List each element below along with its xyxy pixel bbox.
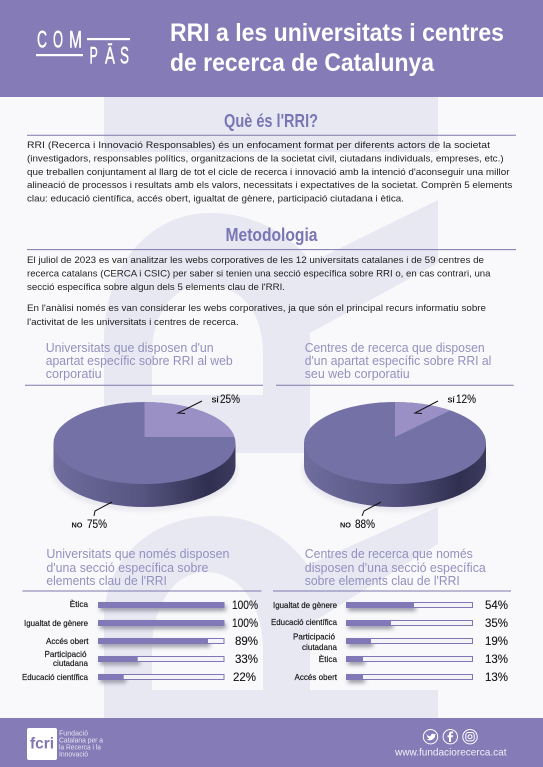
chart title [46,546,229,588]
bar: Accés obert: Accés obert [294,673,338,682]
bar: Accés obert [46,636,258,648]
heading: Metodologia [226,225,318,245]
intro text: RRI (Recerca i Innovació Responsables) és un enfocament format per diferents actors de la societat [27,140,490,151]
logo: Compàs: O [53,27,63,54]
panel: universities pie [25,340,263,531]
bar: Accés obert [294,672,508,684]
methodology text: El juliol de 2023 es van analitzar les webs corporatives de les 12 universitats catalanes i de 59 centres de [27,255,484,266]
label: NO 75%: NO [72,520,83,530]
label: SÍ 12%: SÍ [448,396,456,404]
chart title: corporatiu [46,366,102,381]
title: RRI a les universitats i centres [170,19,504,47]
intro text [27,140,513,205]
logo: Compàs [36,27,130,70]
bar: Accés obert: Accés obert [46,637,89,646]
bar: Accés obert: 89% [235,636,258,648]
logo: Compàs: M [69,27,82,53]
title: de recerca de Catalunya [170,49,435,77]
foundation name: la Recerca i la [59,744,101,752]
bar: Educació científica: 22% [233,672,256,684]
header band [0,0,543,97]
chart title [305,546,487,588]
bar: Igualtat de gènere [273,600,508,612]
label: SÍ 25% [178,394,240,414]
chart title: d'un apartat específic sobre RRI al [305,353,492,368]
background watermark [104,97,438,718]
icon: twitter [423,730,438,744]
bar: Educació científica [22,672,256,684]
bar chart [271,600,508,684]
bar: Educació científica: Educació científica [22,673,88,682]
label: NO 75% [72,502,112,531]
chart title: Universitats que disposen d'un [46,340,214,355]
bar: Participació ciutadana: 33% [235,654,258,666]
bar: Participació ciutadana: 19% [485,636,508,648]
icon: instagram [463,730,477,744]
bar: Igualtat de gènere [24,618,258,630]
chart title: Centres de recerca que només [305,546,473,561]
section: Què és l'RRI [27,111,516,205]
bar: Participació ciutadana: ciutadana [53,659,88,668]
bar: Ètica: 13% [485,654,508,666]
logo: Compàs: C [37,27,47,53]
methodology text [27,255,491,328]
chart title [46,340,233,381]
bar: Participació ciutadana: Participació [293,632,335,642]
logo: fcri [27,728,57,760]
label: SÍ 25%: 25% [220,394,240,406]
logo: Compàs: P [90,43,98,70]
pie chart [302,402,488,511]
bar: Accés obert: 13% [485,672,508,684]
icon: facebook [443,730,457,744]
label: NO 88%: 88% [355,519,375,531]
bar: Educació científica: 35% [485,618,508,630]
panel: universities key elements bars [22,546,262,684]
chart title: Universitats que només disposen [46,546,229,561]
bar: Igualtat de gènere: 100% [232,618,258,630]
chart title: d'una secció específica sobre [46,560,208,575]
bar: Igualtat de gènere: Igualtat de gènere [24,619,88,628]
heading: Què és l'RRI? [224,111,318,131]
panel: research centres pie [276,340,514,531]
foundation name: Innovació [59,752,88,758]
foundation name: Fundació [59,730,88,738]
bar chart [22,599,258,684]
label: NO 88% [340,502,381,531]
methodology text: En l'anàlisi només es van considerar les webs corporatives, ja que són el principal recurs informatiu sobre [27,303,486,314]
bar: Ètica [319,654,508,666]
chart title: elements clau de l'RRI [46,573,167,588]
bar: Igualtat de gènere: 54% [485,600,508,612]
pie chart [52,395,245,511]
bar: Educació científica [271,618,508,630]
bar: Ètica [70,599,258,612]
foundation name: Catalana per a [59,738,103,744]
intro text: que treballen conjuntament al llarg de tot el cicle de recerca i innovació amb la intenció d'aconseguir una millor [27,167,510,178]
bar: Ètica: 100% [232,600,258,612]
bar: Igualtat de gènere: Igualtat de gènere [273,601,337,610]
foundation name [59,730,103,758]
intro text: alineació de processos i resultats amb els valors, necessitats i expectatives de la societat. Comprèn 5 elements [27,180,513,191]
intro text: clau: educació científica, accés obert, igualtat de gènere, participació ciutadana i ètica. [27,194,404,205]
bar: Participació ciutadana [44,650,258,668]
label: NO 75%: 75% [87,519,107,531]
logo: Compàs: Ā [105,42,115,70]
methodology text: secció específica sobre algun dels 5 elements clau de l'RRI. [27,282,285,293]
label: NO 88%: NO [340,520,351,530]
logo: Compàs: S [120,43,129,70]
website: www.fundaciorecerca.cat [394,746,507,758]
bar: Ètica: Ètica [319,654,337,664]
chart title: apartat específic sobre RRI al web [46,353,233,368]
title [170,19,504,77]
bar: Participació ciutadana: Participació [44,650,87,659]
label: SÍ 25%: SÍ [212,396,220,404]
methodology text: l'activitat de les universitats i centres de recerca. [27,317,239,328]
bar: Participació ciutadana [293,632,508,652]
logo: fcri: fcri [30,736,54,752]
bar: Ètica: Ètica [70,599,88,609]
label: SÍ 12%: 12% [456,394,476,406]
footer band [0,718,543,767]
bar: Educació científica: Educació científica [271,618,337,627]
chart title: disposen d'una secció específica [305,560,487,575]
panel: research centres key elements bars [271,546,511,684]
chart title: Centres de recerca que disposen [305,340,485,355]
section: Metodologia [27,225,516,328]
chart title: seu web corporatiu [305,366,410,381]
intro text: (investigadors, responsables polítics, organitzacions de la societat civil, ciutadans individuals, empreses, etc.) [27,153,504,164]
label: SÍ 12% [415,394,476,414]
methodology text: recerca catalans (CERCA i CSIC) per saber si tenien una secció específica sobre RRI o, en cas contrari, una [27,268,491,280]
bar: Participació ciutadana: ciutadana [302,643,337,652]
chart title [305,340,492,381]
chart title: sobre elements clau de l'RRI [305,573,460,588]
